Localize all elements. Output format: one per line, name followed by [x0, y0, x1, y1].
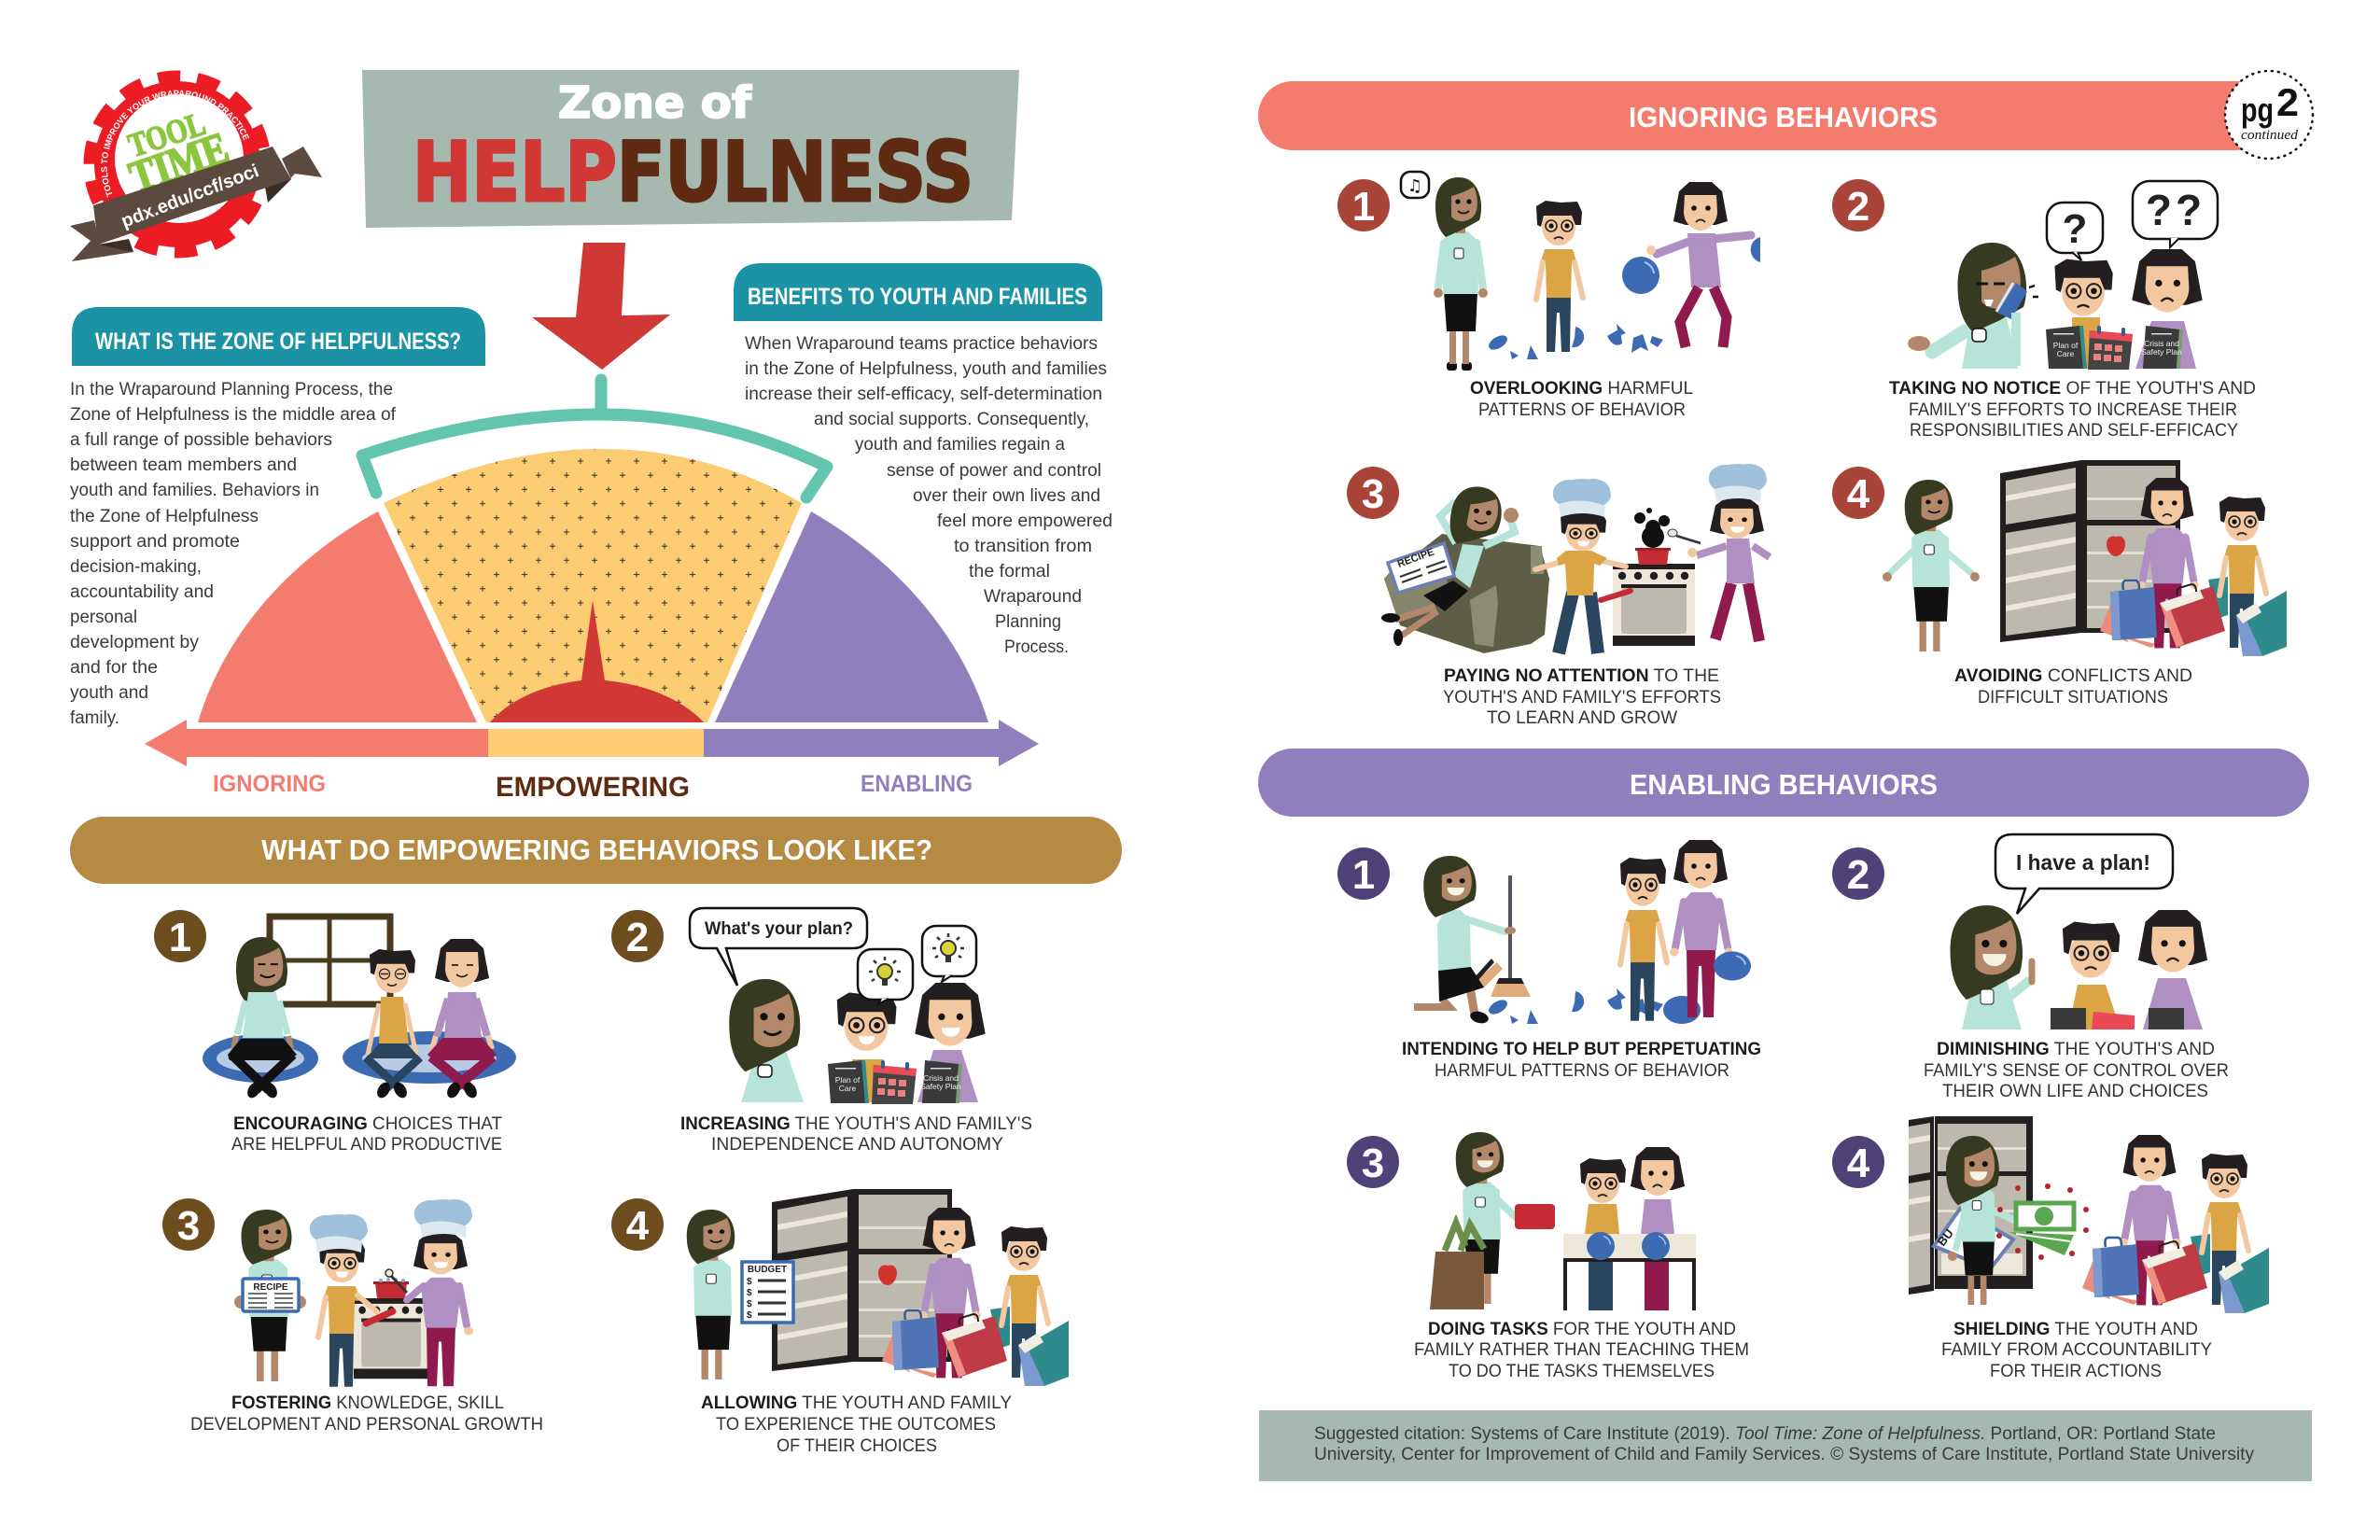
banner: ignoring behaviors — [1258, 81, 2271, 150]
logo: Tool Time badge: TIME — [123, 123, 235, 203]
text block: benefits: When Wraparound teams practice behaviors — [745, 334, 1098, 354]
text block: zone definition: youth and families. Behaviors in — [70, 481, 319, 500]
scale arrow: ignoring to enabling — [145, 720, 1039, 766]
label: empowering: EMPOWERING — [496, 772, 690, 803]
illustration: on the phone: ?? — [2146, 186, 2205, 234]
illustration: worker talking over family — [1951, 905, 2207, 1029]
illustration: shielding with money: BU — [1935, 1226, 1956, 1249]
caption: FAMILY FROM ACCOUNTABILITY — [1941, 1340, 2212, 1360]
text block: zone definition: family. — [70, 708, 119, 728]
gauge segment: empowering zone — [384, 449, 802, 722]
caption — [190, 1393, 543, 1435]
number badge — [1832, 847, 1884, 900]
panel: enabling 2 — [1832, 834, 2229, 1101]
caption: INDEPENDENCE AND AUTONOMY — [711, 1135, 1003, 1155]
citation box — [1259, 1410, 2312, 1481]
caption: YOUTH'S AND FAMILY'S EFFORTS — [1443, 688, 1721, 707]
illustration: empty fridge and budget: $ — [747, 1299, 752, 1309]
text block: zone definition: accountability and — [70, 582, 214, 602]
caption — [1924, 1040, 2229, 1101]
text block: zone definition: and for the — [70, 658, 158, 678]
page badge: pg 2 continued: pg — [2241, 91, 2274, 129]
title banner: Zone of — [558, 77, 752, 128]
caption: DEVELOPMENT AND PERSONAL GROWTH — [190, 1415, 543, 1435]
caption: TO DO THE TASKS THEMSELVES — [1449, 1362, 1715, 1381]
speech bubble: I have a plan: I have a plan! — [2016, 850, 2150, 875]
panel: empowering 3 — [162, 1198, 543, 1435]
illustration: sweeping up — [1414, 840, 1751, 1025]
caption: THEIR OWN LIFE AND CHOICES — [1942, 1082, 2208, 1101]
ribbon tails — [70, 147, 322, 261]
number badge — [1832, 467, 1884, 519]
text block: benefits: youth and families regain a — [855, 435, 1065, 455]
caption: OF THEIR CHOICES — [777, 1436, 937, 1456]
heading tab: what is the zone: WHAT IS THE ZONE OF HELPFULNESS? — [95, 329, 461, 355]
panel: ignoring 4 — [1832, 460, 2287, 707]
caption: OVERLOOKING HARMFUL — [1470, 379, 1693, 399]
caption: ARE HELPFUL AND PRODUCTIVE — [231, 1135, 502, 1155]
caption: FOSTERING KNOWLEDGE, SKILL — [231, 1393, 504, 1413]
caption: DOING TASKS FOR THE YOUTH AND — [1428, 1320, 1736, 1339]
banner: enabling behaviors: ENABLING BEHAVIORS — [1630, 768, 1938, 801]
gauge segment: enabling — [715, 511, 988, 722]
logo: Tool Time badge: pdx.edu/ccf/soci — [119, 161, 261, 232]
number badge — [611, 1198, 664, 1251]
number badge: 2 — [1847, 852, 1869, 898]
text block: benefits: Process. — [1004, 637, 1069, 657]
text block: zone definition — [70, 380, 397, 728]
illustration: shielding with money — [1909, 1116, 2269, 1313]
gauge needle — [490, 600, 704, 722]
caption — [1414, 1320, 1749, 1381]
text block: zone definition: development by — [70, 633, 199, 652]
number badge — [154, 910, 206, 962]
caption: PAYING NO ATTENTION TO THE — [1444, 666, 1719, 686]
caption: AVOIDING CONFLICTS AND — [1954, 666, 2192, 686]
panel: enabling 1 — [1337, 840, 1761, 1081]
speech bubble: what's your plan: What's your plan? — [705, 919, 853, 939]
illustration: relaxing in armchair — [1381, 464, 1770, 653]
text block: zone definition: In the Wraparound Planning Process, the — [70, 380, 393, 399]
caption: RESPONSIBILITIES AND SELF-EFFICACY — [1910, 421, 2238, 441]
panel: enabling 3 — [1347, 1132, 1749, 1381]
gear — [90, 77, 265, 252]
number badge: 2 — [1847, 184, 1869, 230]
text block: zone definition: between team members and — [70, 455, 297, 475]
caption: SHIELDING THE YOUTH AND — [1953, 1320, 2198, 1339]
citation box: Suggested citation: Systems of Care Institute (2019). Tool Time: Zone of Helpfulness. Portland, OR: Portland State — [1314, 1424, 2216, 1444]
caption — [1954, 666, 2192, 707]
caption: FAMILY RATHER THAN TEACHING THEM — [1414, 1340, 1749, 1360]
chart: helpfulness gauge — [145, 380, 1039, 803]
caption: ALLOWING THE YOUTH AND FAMILY — [701, 1393, 1012, 1413]
number badge: 4 — [626, 1203, 650, 1249]
illustration: empty fridge and budget: $ — [747, 1310, 752, 1321]
banner: what do empowering behaviors look like: WHAT DO EMPOWERING BEHAVIORS LOOK LIKE? — [261, 833, 932, 866]
text block: benefits: to transition from — [954, 537, 1092, 556]
number badge — [611, 910, 664, 962]
caption — [231, 1114, 502, 1155]
text block: zone definition: personal — [70, 608, 137, 627]
panel: ignoring 1 — [1337, 172, 1760, 420]
caption: TAKING NO NOTICE OF THE YOUTH'S AND — [1889, 379, 2256, 399]
number badge — [162, 1198, 215, 1251]
text block: benefits: over their own lives and — [913, 486, 1100, 506]
caption: DIFFICULT SITUATIONS — [1978, 688, 2168, 707]
illustration: empty fridge and budget: $ — [747, 1288, 752, 1298]
citation box: University, Center for Improvement of Child and Family Services. © Systems of Care Institute, Portland State University — [1314, 1445, 2255, 1464]
number badge: 1 — [1352, 852, 1375, 898]
heading tab: benefits: BENEFITS TO YOUTH AND FAMILIES — [748, 284, 1087, 310]
text block: zone definition: support and promote — [70, 532, 240, 552]
text block: benefits: increase their self-efficacy, self-determination — [745, 385, 1102, 404]
panel: empowering 2 — [611, 908, 1032, 1155]
logo: Tool Time badge: TOOL — [124, 105, 210, 164]
number badge: 3 — [1362, 1141, 1384, 1186]
caption: INCREASING THE YOUTH'S AND FAMILY'S — [680, 1114, 1032, 1134]
number badge: 3 — [1362, 471, 1384, 517]
speech bubble: what's your plan — [690, 908, 867, 986]
illustration: empty fridge and budget: BUDGET — [748, 1265, 787, 1275]
caption: FOR THEIR ACTIONS — [1990, 1362, 2162, 1381]
caption: TO EXPERIENCE THE OUTCOMES — [716, 1415, 996, 1435]
caption — [680, 1114, 1032, 1155]
heading tab: what is the zone — [72, 307, 485, 366]
caption — [1470, 379, 1693, 420]
illustration: relaxing in armchair: RECIPE — [1396, 547, 1435, 570]
arrow: red down arrow — [532, 243, 670, 370]
illustration: sitting together — [203, 917, 516, 1100]
caption: ENCOURAGING CHOICES THAT — [233, 1114, 502, 1134]
number badge: 3 — [177, 1203, 200, 1249]
illustration: avoiding conflict at fridge — [1883, 460, 2287, 656]
text block: benefits: the formal — [969, 562, 1050, 581]
caption — [701, 1393, 1012, 1456]
logo: Tool Time badge: TOOLS TO IMPROVE YOUR WRAPAROUND PRACTICE — [101, 90, 250, 198]
gauge segment: ignoring — [198, 511, 477, 722]
text block: benefits: in the Zone of Helpfulness, youth and families — [745, 359, 1107, 379]
caption: FAMILY'S SENSE OF CONTROL OVER — [1924, 1061, 2229, 1081]
illustration: doing tasks — [1430, 1132, 1696, 1310]
panel: ignoring 2 — [1832, 179, 2256, 441]
text block: zone definition: youth and — [70, 683, 148, 703]
number badge — [1337, 847, 1390, 900]
number badge: 4 — [1847, 1141, 1870, 1186]
caption: HARMFUL PATTERNS OF BEHAVIOR — [1435, 1061, 1729, 1081]
page badge: pg 2 continued: 2 — [2276, 80, 2299, 124]
illustration: on the phone: ? — [2063, 206, 2087, 252]
text block: benefits: Planning — [995, 612, 1061, 632]
number badge: 1 — [1352, 184, 1375, 230]
text block: zone definition: a full range of possible behaviors — [70, 430, 332, 450]
text block: zone definition: the Zone of Helpfulness — [70, 507, 259, 526]
text block: zone definition: Zone of Helpfulness is the middle area of — [70, 405, 397, 425]
illustration: overlooking behavior — [1401, 172, 1760, 371]
number badge: 1 — [169, 915, 191, 960]
page badge: pg 2 continued — [2225, 71, 2313, 159]
panel: empowering 4 — [611, 1189, 1069, 1456]
text block: benefits: and social supports. Consequently, — [814, 410, 1089, 429]
title banner — [362, 70, 1019, 228]
panel: ignoring 3 — [1347, 464, 1770, 728]
number badge: 2 — [626, 915, 649, 960]
illustration: empty fridge and budget — [687, 1189, 1069, 1386]
caption — [1941, 1320, 2212, 1381]
caption — [1443, 666, 1721, 728]
label: enabling: ENABLING — [861, 771, 973, 797]
text block: zone definition: decision-making, — [70, 557, 202, 577]
illustration: cooking with recipe: RECIPE — [253, 1282, 288, 1293]
text block: benefits — [745, 334, 1113, 657]
illustration: on the phone — [1908, 181, 2218, 370]
caption: DIMINISHING THE YOUTH'S AND — [1937, 1040, 2215, 1059]
number badge — [1347, 467, 1399, 519]
number badge — [1337, 179, 1390, 231]
page badge: pg 2 continued: continued — [2241, 128, 2299, 143]
text block: benefits: Wraparound — [984, 587, 1082, 607]
illustration: empty fridge and budget: $ — [747, 1277, 752, 1287]
label: ignoring: IGNORING — [213, 771, 326, 797]
panel: empowering 1 — [154, 910, 516, 1155]
banner: ignoring behaviors: IGNORING BEHAVIORS — [1629, 101, 1938, 133]
illustration: team with ideas — [729, 926, 986, 1104]
caption: INTENDING TO HELP BUT PERPETUATING — [1402, 1040, 1761, 1059]
caption — [1402, 1040, 1761, 1081]
heading tab: benefits — [734, 263, 1102, 321]
text block: benefits: sense of power and control — [887, 461, 1101, 481]
caption: TO LEARN AND GROW — [1487, 708, 1677, 728]
illustration: cooking with recipe — [234, 1199, 473, 1387]
number badge: 4 — [1847, 471, 1870, 517]
banner: enabling behaviors — [1258, 749, 2309, 817]
bracket: teal zone marker — [362, 380, 827, 497]
caption: FAMILY'S EFFORTS TO INCREASE THEIR — [1909, 400, 2237, 420]
caption: PATTERNS OF BEHAVIOR — [1478, 400, 1686, 420]
number badge — [1832, 1136, 1884, 1188]
banner: what do empowering behaviors look like — [70, 817, 1122, 884]
caption — [1889, 379, 2256, 441]
text block: benefits: feel more empowered — [937, 511, 1113, 531]
speech bubble: I have a plan — [1995, 834, 2173, 914]
illustration: overlooking behavior: ♫ — [1407, 176, 1422, 196]
number badge — [1347, 1136, 1399, 1188]
number badge — [1832, 179, 1884, 231]
panel: enabling 4 — [1832, 1116, 2269, 1381]
logo: Tool Time badge — [70, 71, 322, 261]
ribbon band — [93, 147, 291, 245]
title banner: HELPFULNESS — [413, 124, 973, 220]
